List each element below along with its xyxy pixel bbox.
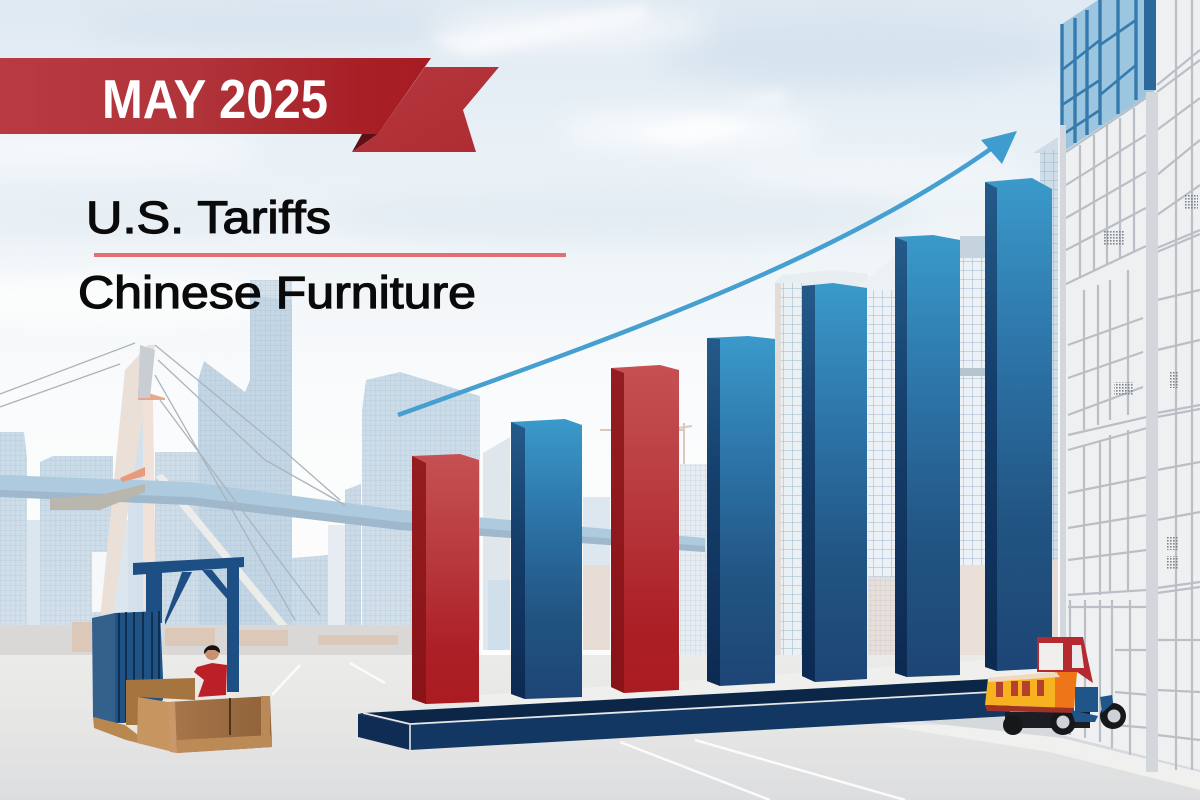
bar 4 blue [707, 336, 775, 686]
background: central and right buildings [483, 137, 1058, 675]
truck body [985, 672, 1077, 713]
title: U.S. Tariffs: U.S. Tariffs [86, 192, 331, 243]
stacked shipping containers [920, 0, 1200, 772]
bridge with pylons and cables [0, 343, 705, 640]
chart base platform [358, 678, 1010, 750]
truck chassis and wheels [1003, 703, 1126, 735]
bar 7 blue [985, 178, 1052, 671]
bar 1 red [412, 454, 479, 704]
forklift truck [985, 637, 1126, 735]
title divider line [94, 253, 566, 257]
bar 3 red [611, 365, 679, 693]
white container panels [1066, 0, 1200, 770]
blue shipping container [92, 611, 163, 723]
date ribbon banner [0, 58, 499, 152]
blue gantry frame [133, 557, 244, 692]
banner date text: MAY 2025 [102, 68, 328, 130]
wooden crates [93, 678, 272, 753]
bar 2 blue [511, 419, 582, 699]
blue top container [1062, 0, 1156, 152]
port scene: gantry, container, crates and worker [92, 557, 272, 753]
bar 6 blue [895, 235, 960, 677]
worker in red jacket [194, 645, 227, 697]
truck cab [1037, 637, 1093, 683]
rising trend arrow [398, 131, 1017, 415]
truck blue fenders [1071, 687, 1113, 722]
bar 5 blue [802, 283, 867, 682]
background: left city skyline [0, 280, 480, 640]
ground and road [0, 622, 1200, 800]
title: Chinese Furniture: Chinese Furniture [78, 267, 476, 318]
bar chart [358, 178, 1052, 750]
